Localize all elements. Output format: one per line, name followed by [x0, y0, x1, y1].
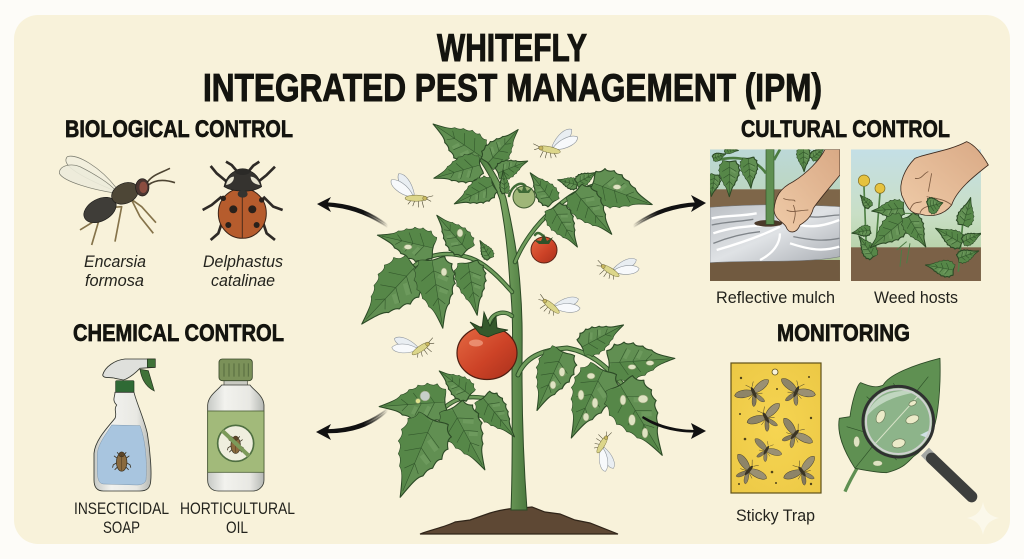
- label: Delphastus catalinae: [203, 252, 283, 290]
- title: [203, 27, 822, 110]
- arrow: to chemical control: [316, 409, 388, 440]
- heading: chemical control: CHEMICAL CONTROL: [73, 320, 284, 347]
- label: Delphastus catalinae: Delphastus: [203, 252, 283, 271]
- heading: biological control: BIOLOGICAL CONTROL: [65, 116, 293, 143]
- arrow: to biological control: [317, 197, 388, 227]
- icon: yellow sticky trap: [726, 363, 825, 493]
- small red tomato: [531, 234, 557, 263]
- soil mound: [420, 507, 618, 534]
- arrow: to monitoring: [642, 416, 706, 439]
- label: Encarsia formosa: formosa: [85, 271, 144, 290]
- label: horticultural oil: HORTICULTURAL: [180, 499, 295, 518]
- leaves: [345, 109, 683, 507]
- label: horticultural oil: OIL: [226, 518, 248, 537]
- main stem: [478, 155, 527, 510]
- label: reflective mulch: Reflective mulch: [716, 288, 835, 307]
- icon: magnifying glass over leaf: [839, 358, 972, 497]
- icon: Encarsia formosa wasp: [59, 156, 175, 245]
- icon: spray bottle: [94, 359, 155, 491]
- label: insecticidal soap: SOAP: [103, 518, 140, 537]
- plant branches: [413, 184, 623, 420]
- icon: sparkle watermark: [967, 502, 999, 535]
- label: Delphastus catalinae: catalinae: [211, 271, 275, 290]
- label: Encarsia formosa: [84, 252, 146, 290]
- central tomato plant illustration: [345, 109, 683, 534]
- label: sticky trap: Sticky Trap: [736, 506, 815, 525]
- green tomato: [513, 184, 535, 208]
- title: WHITEFLY: [437, 27, 587, 70]
- photo: weed hosts illustration: [851, 142, 988, 281]
- arrow: to cultural control: [633, 195, 706, 227]
- label: insecticidal soap: [74, 499, 169, 537]
- heading: cultural control: CULTURAL CONTROL: [741, 116, 950, 143]
- icon: Delphastus catalinae beetle: [203, 162, 283, 240]
- label: Encarsia formosa: Encarsia: [84, 252, 146, 271]
- heading: monitoring: MONITORING: [777, 320, 910, 347]
- icon: horticultural oil bottle: [208, 359, 264, 491]
- large red tomato: [457, 312, 517, 380]
- label: horticultural oil: [180, 499, 295, 537]
- whitefly damage spots: [404, 184, 654, 438]
- whiteflies: [387, 129, 642, 474]
- title: INTEGRATED PEST MANAGEMENT (IPM): [203, 67, 822, 110]
- label: weed hosts: Weed hosts: [874, 288, 958, 307]
- label: insecticidal soap: INSECTICIDAL: [74, 499, 169, 518]
- photo: reflective mulch illustration: [705, 144, 840, 281]
